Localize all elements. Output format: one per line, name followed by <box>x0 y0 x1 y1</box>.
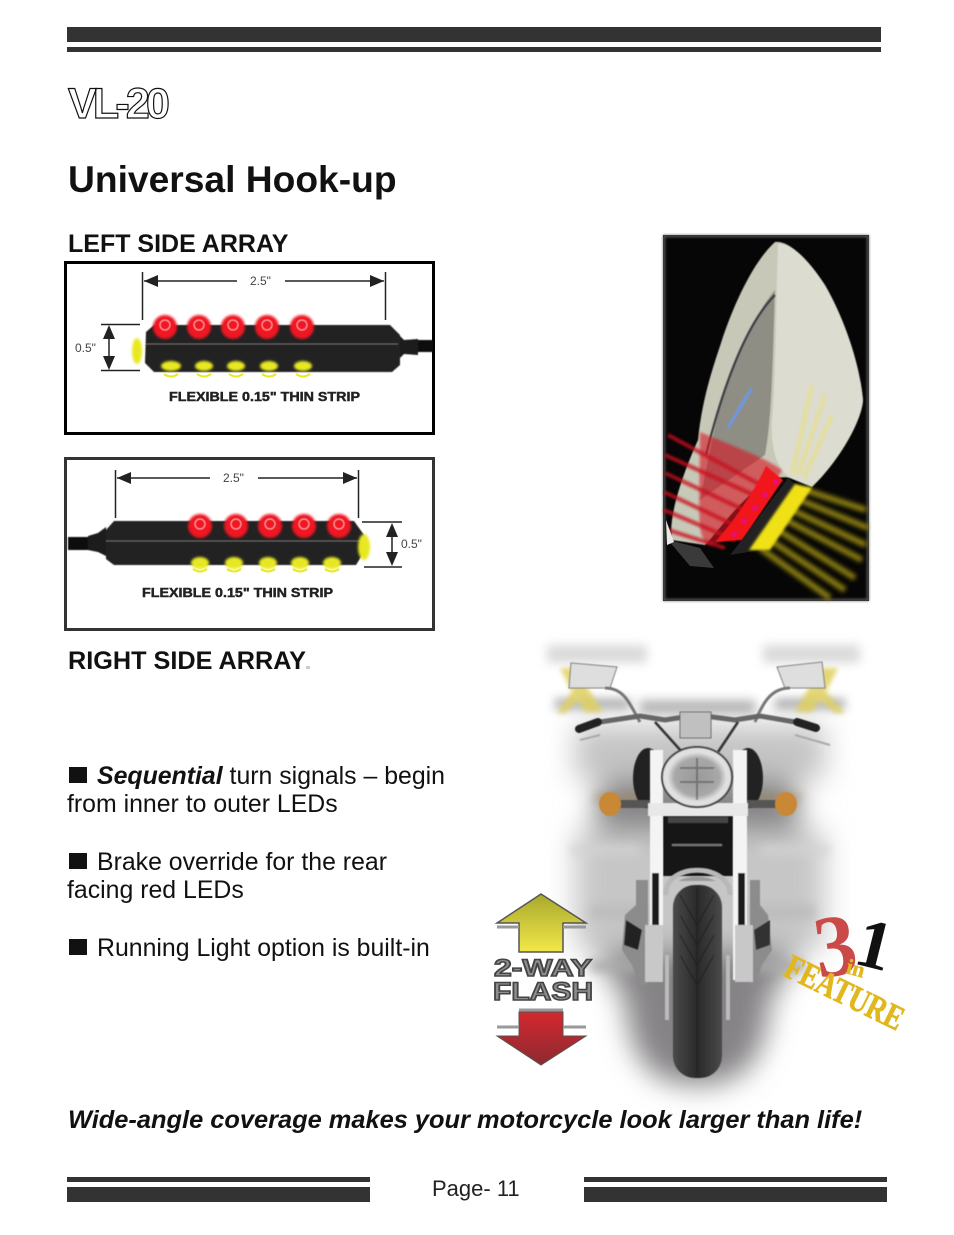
badge: 3 in 1 feature: 3 <box>808 895 863 997</box>
headlight <box>662 747 732 807</box>
badge: 3 in 1 feature <box>778 895 911 1038</box>
LED housing <box>730 478 800 555</box>
yellow LEDs and beams <box>760 490 868 598</box>
yellow glow on shell <box>792 385 832 478</box>
motion blur background <box>575 725 825 1085</box>
mirror shell <box>671 242 863 545</box>
badge: 3 in 1 feature: FEATURE <box>778 947 911 1038</box>
yellow mirror beams <box>557 668 845 713</box>
yellow LEDs <box>132 338 312 376</box>
icon: 2-way flash arrows <box>493 894 593 1065</box>
front forks <box>645 750 753 1020</box>
2-WAY FLASH label <box>493 955 593 1006</box>
turn signals <box>599 792 797 816</box>
fender and tyre <box>666 870 730 1078</box>
panel: right side array diagram <box>66 458 434 630</box>
bullet: brake override: Brake override for the rear <box>97 849 387 876</box>
width dimension <box>142 272 386 320</box>
height dimension: 0.5" <box>401 537 422 551</box>
up arrow <box>497 894 586 952</box>
feature list <box>67 763 445 962</box>
width dimension: 2.5" <box>250 274 271 288</box>
top header bars <box>67 27 881 52</box>
fairings and dark engine <box>633 748 763 876</box>
badge: 3 in 1 feature: 1 <box>848 904 901 987</box>
page number: Page- 11 <box>432 1176 520 1201</box>
model name: VL-20: VL-20 <box>68 80 169 128</box>
width dimension <box>116 470 358 518</box>
heading: right side array: RIGHT SIDE ARRAY <box>68 647 306 675</box>
height dimension <box>75 324 140 370</box>
strip caption: FLEXIBLE 0.15" THIN STRIP <box>142 586 333 600</box>
photo: motorcycle front view <box>547 645 860 1085</box>
engine chrome left and right <box>622 880 772 985</box>
red LEDs <box>153 315 314 339</box>
2-WAY FLASH label: FLASH <box>493 978 593 1006</box>
handlebars <box>579 712 830 752</box>
heading: left side array: LEFT SIDE ARRAY <box>68 230 289 258</box>
bullet: running light: Running Light option is built-in <box>97 935 430 962</box>
panel: left side array diagram <box>66 262 434 434</box>
bullet: brake override <box>67 849 387 904</box>
height dimension <box>362 522 422 567</box>
strip caption: FLEXIBLE 0.15" THIN STRIP <box>169 390 360 404</box>
bullet: sequential turn signals: from inner to outer LEDs <box>67 791 338 818</box>
width dimension: 2.5" <box>223 471 244 485</box>
bullet: sequential turn signals <box>67 763 445 818</box>
down arrow <box>497 1012 586 1065</box>
LED strip <box>145 325 433 372</box>
LED strip <box>68 521 364 565</box>
badge: 3 in 1 feature: in <box>844 954 868 983</box>
yellow LEDs <box>191 534 370 572</box>
bullet: sequential turn signals: Sequential turn signals – begin <box>97 763 445 790</box>
footer left bars <box>67 1177 370 1202</box>
red beams <box>699 432 782 545</box>
motion streaks <box>547 645 860 972</box>
bullet: brake override: facing red LEDs <box>67 877 244 904</box>
photo: mirror with LED beams <box>663 235 869 601</box>
red LEDs <box>188 514 351 538</box>
tagline: Wide-angle coverage makes your motorcycle look larger than life! <box>68 1106 863 1134</box>
heading: Universal Hook-up: Universal Hook-up <box>68 158 397 200</box>
2-WAY FLASH label: 2-WAY <box>494 955 592 982</box>
height dimension: 0.5" <box>75 341 96 355</box>
footer right bars <box>584 1177 887 1202</box>
mirror mount <box>668 540 714 568</box>
mirrors <box>569 662 825 722</box>
